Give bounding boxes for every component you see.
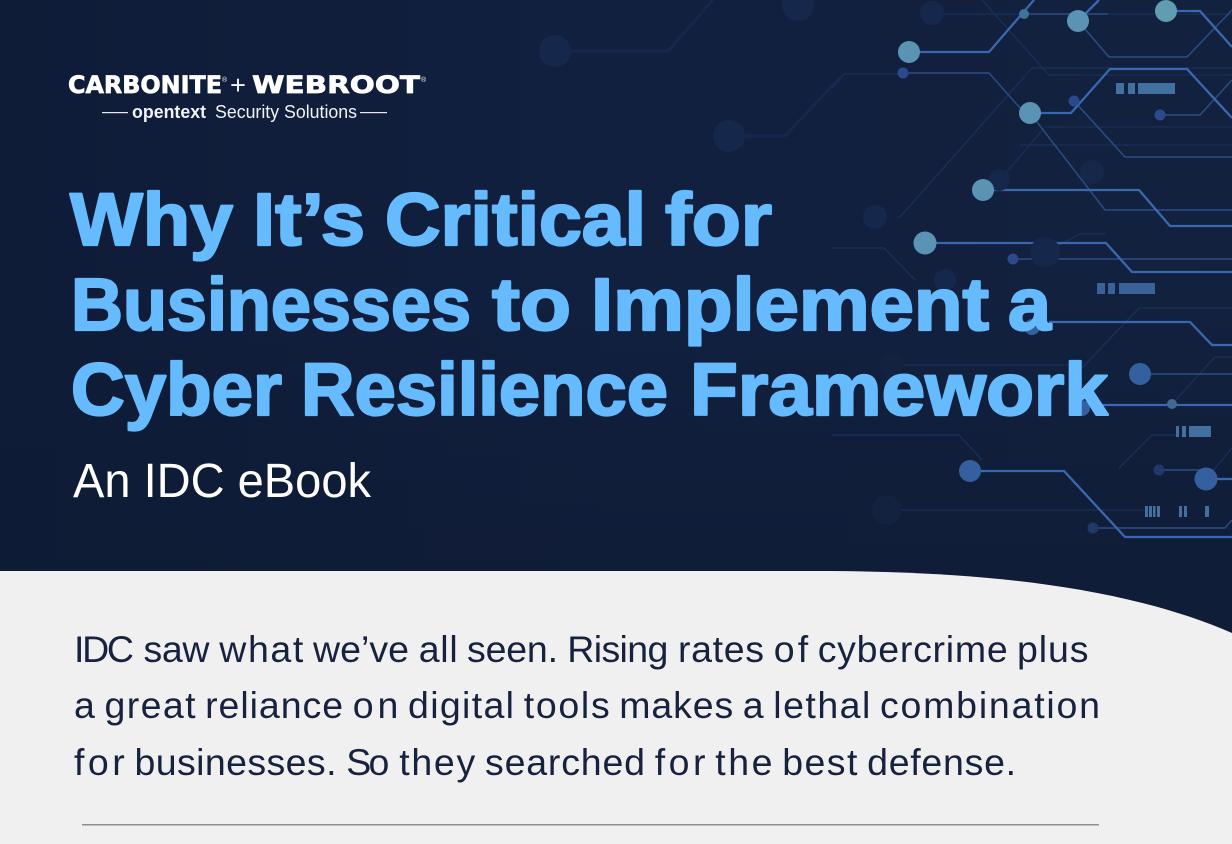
intro text: Rising [567, 628, 668, 670]
blue circuit nodes [959, 319, 1218, 490]
intro text: great [104, 684, 196, 726]
logo: opentext tagline [102, 102, 387, 122]
title: Framework [690, 348, 1109, 431]
intro text: what [218, 628, 304, 670]
intro text: the [715, 741, 772, 783]
intro text: on [353, 684, 398, 726]
intro text: defense. [867, 741, 1016, 783]
logo: registered marks: ® [421, 76, 427, 84]
title: Why [70, 178, 233, 261]
intro text: best [782, 741, 858, 783]
logo [68, 70, 427, 122]
intro text: we’ve [312, 628, 409, 670]
title: Cyber [71, 348, 282, 431]
title: Businesses [71, 263, 471, 346]
small circuit nodes [898, 9, 1177, 534]
intro text: searched [485, 741, 645, 783]
faint far-left circuits [555, 0, 840, 136]
title: Critical [385, 178, 646, 261]
intro text: a [74, 684, 95, 726]
intro text: IDC [74, 628, 134, 670]
title: Resilience [301, 348, 668, 431]
title: Implement [591, 263, 989, 346]
logo: registered marks: ® [222, 76, 228, 84]
intro text: reliance [205, 684, 343, 726]
curved light panel [0, 571, 1232, 844]
intro text: seen. [467, 628, 558, 670]
intro text: plus [1017, 628, 1088, 670]
faint circuit nodes [539, 0, 1104, 525]
intro text: businesses. [134, 741, 336, 783]
logo: registered marks [222, 76, 427, 84]
intro text: rates [678, 628, 764, 670]
intro text: a [743, 684, 764, 726]
intro text: all [419, 628, 458, 670]
intro text: for [74, 741, 125, 783]
title: to [492, 263, 571, 346]
intro text: combination [880, 684, 1100, 726]
logo: opentext tagline: opentext [132, 102, 206, 122]
title [70, 178, 1109, 431]
intro text: makes [619, 684, 733, 726]
logo: plus sign: + [230, 70, 246, 100]
intro text: for [655, 741, 706, 783]
circuit board decoration [555, 0, 1232, 537]
intro text: they [399, 741, 475, 783]
logo: carbonite: CARBONITE [68, 71, 222, 99]
intro text: saw [144, 628, 210, 670]
title: a [1008, 263, 1052, 346]
intro text: of [774, 628, 809, 670]
logo: webroot: WEBROOT [252, 71, 421, 99]
intro text: digital [408, 684, 514, 726]
dark header background [0, 0, 1232, 660]
main circuits [909, 0, 1232, 537]
title: It’s [253, 178, 365, 261]
data bars [1097, 83, 1211, 517]
intro text: cybercrime [818, 628, 1008, 670]
logo: opentext tagline: Security Solutions [215, 102, 357, 122]
subtitle: An IDC eBook [73, 455, 372, 508]
title: for [665, 178, 772, 261]
intro text: tools [524, 684, 610, 726]
intro text: lethal [773, 684, 870, 726]
intro text [74, 628, 1100, 783]
teal circuit nodes [898, 0, 1177, 254]
dim thin circuits [832, 0, 1232, 510]
intro text: So [346, 741, 389, 783]
thin bright circuits [903, 10, 1232, 528]
